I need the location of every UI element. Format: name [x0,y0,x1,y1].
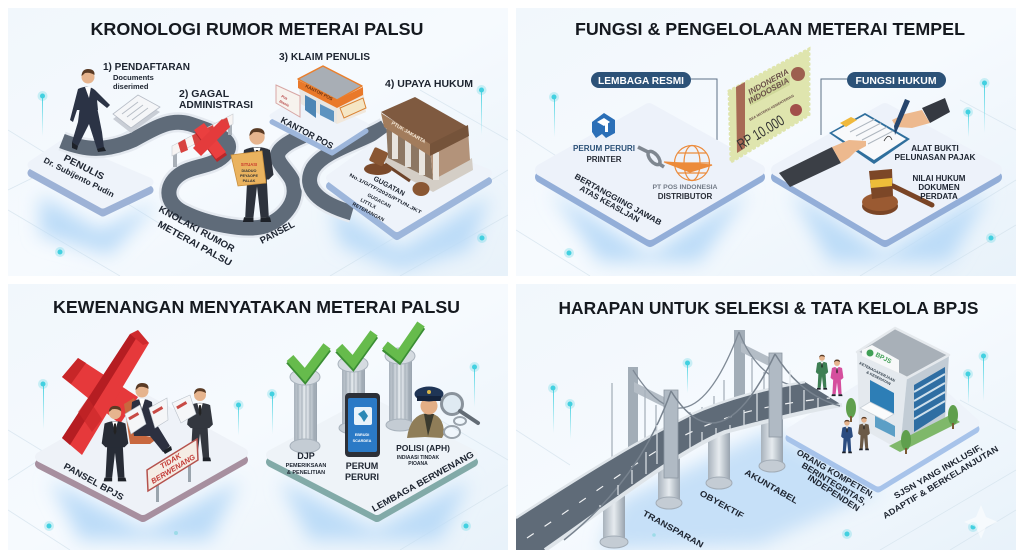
label: nilai hukum: NILAI HUKUM [913,174,966,183]
documents held [125,395,196,434]
label: 3 klaim penulis: 3) KLAIM PENULIS [279,52,370,63]
label: kantor pos: KANTOR POS [279,115,335,151]
person: left official [102,406,128,481]
label: orang kompeten: ORANG KOMPETEN, [795,447,876,500]
panel: fungsi dan pengelolaan meterai tempel [516,8,1016,276]
label: polisi aph: POLISI (APH) [396,443,450,453]
sign: klaim penulis [276,85,300,117]
title: FUNGSI & PENGELOLAAN METERAI TEMPEL [575,19,965,39]
clipboard [829,113,910,164]
label: transparan: TRANSPARAN [641,508,705,550]
magnifier and handcuffs [442,394,478,438]
label: gugatan: RETERANGAN [351,201,385,224]
label: akuntabel: AKUNTABEL [743,467,800,506]
person: penulis walking [70,69,110,152]
label: djp [286,451,326,476]
label: perum peruri [345,461,379,482]
panel: harapan untuk seleksi dan tata kelola bpjs [516,284,1016,550]
label: 2 gagal administrasi: 2) GAGAL [179,88,230,100]
label: sjsn: SJSN YANG INKLUSIF, [892,442,984,501]
label: djp: DJP [297,451,315,461]
phone: EBRUDI [355,433,369,437]
label: pt pos distributor [652,184,718,199]
sparkle watermark [964,505,998,539]
label: gugatan: LITTLX [359,197,377,211]
logo: pos indonesia [664,146,712,180]
label: djp: PEMERIKSAAN [286,463,326,469]
pillar: polisi [385,348,415,431]
title: HARAPAN UNTUK SELEKSI & TATA KELOLA BPJS [558,298,978,318]
gavel [862,169,932,215]
bridge deck [516,382,842,550]
sign: tidak berwenang: BERWENANG [149,452,197,486]
label: polisi aph: INDIAASI TINDAK [397,455,439,461]
marker dots [38,85,487,257]
label: pt pos distributor: PT POS INDONESIA [652,184,718,191]
label: knolaki rumor: METERAI PALSU [156,219,234,269]
hand: left sleeve [779,140,866,187]
label: obyektif: OBYEKTIF [698,488,746,521]
phone [345,393,380,457]
platform: penulis [32,145,149,212]
label: pansel bpjs: PANSEL BPJS [62,461,125,502]
label: 1 pendaftaran: Documents [113,73,154,82]
gavel [364,147,430,196]
label: perum peruri: PERUM [346,461,378,471]
panel: kewenangan menyatakan meterai palsu [8,284,508,550]
lawn and trees [846,398,960,454]
label: polisi aph: PIOANA [408,461,428,467]
label: gugatan [348,172,422,224]
marker dots [548,351,988,539]
document stack [113,95,160,133]
title: KRONOLOGI RUMOR METERAI PALSU [90,19,424,39]
bpjs building [857,328,949,450]
platform: bpjs [790,360,975,488]
panel: kronologi rumor meterai palsu [8,8,508,276]
folder: PALAK [243,179,256,183]
label: 1 pendaftaran [104,62,190,89]
kantor pos building: KANTOR POS [305,83,333,101]
marker dots [549,78,996,258]
courthouse: PTUK JAKARTA [390,121,427,145]
sign: tidak berwenang [147,439,198,502]
label: perum peruri printer [574,145,634,162]
label: knolaki rumor: KNOLAKI RUMOR [157,204,236,255]
bpjs building: BPJS [874,352,893,366]
seated official [130,383,172,454]
stamp rp 10.000 [729,49,809,162]
label: bertanggung jawab: BERTANGGIING JAWAB [573,172,663,227]
bridge front towers and cables [564,353,840,540]
stamp rp 10.000: RP 10.000 [734,112,788,153]
label: alat bukti: ALAT BUKTI [911,144,959,153]
kantor pos building [298,66,366,124]
label: pt pos distributor: DISTRIBUTOR [658,192,712,201]
label: pansel: PANSEL [258,219,297,247]
red x [193,119,230,162]
winding road [62,122,385,228]
label: gugatan: GUGATAN [372,176,406,198]
title: KEWENANGAN MENYATAKAN METERAI PALSU [53,297,460,317]
pillar: djp [290,369,320,453]
phone: SCARDEA [353,439,372,443]
folder: SITUASI [241,162,257,167]
courthouse [381,97,473,192]
label: alat bukti [894,144,976,162]
sign: klaim penulis: Pos [281,94,288,101]
platform: lembaga berwenang [271,402,473,517]
people near building [816,355,870,453]
label: perum peruri printer: PRINTER [586,155,622,164]
sign: tidak berwenang: TIDAK [158,451,183,471]
stamp rp 10.000: INDOOSBIA [747,76,791,106]
label: gugatan: No.1/G/TF/2025/PTUN.JKT [348,172,422,216]
label: alat bukti: PELUNASAN PAJAK [894,153,976,162]
platform: pansel bpjs [40,398,243,517]
bridge piers [600,415,785,548]
check marks [290,324,421,377]
stamp rp 10.000: BEA MATERAI KEMENTERIAN [749,94,795,122]
police officer [407,386,444,438]
platform: lembaga resmi [541,109,759,241]
label: djp: & PENELITIAN [287,470,325,476]
label: nilai hukum: PERDATA [920,192,958,201]
bpjs building: & KESEHATAN [866,370,892,386]
label: 2 gagal administrasi [179,90,252,108]
label: gugatan: GUGACAN [366,192,392,210]
label: bertanggung jawab: ATAS KEASLJAN [578,184,641,224]
label: 1 pendaftaran: 1) PENDAFTARAN [103,61,190,73]
label: nilai hukum [913,174,966,201]
logo: perum peruri [592,113,615,138]
label: 2 gagal administrasi: ADMINISTRASI [179,99,253,111]
bridge rear towers and cables [612,330,808,462]
pill: lembaga resmi: LEMBAGA RESMI [598,76,684,87]
label: polisi aph [396,443,450,467]
label: penulis: Dr. Subijento Pudin [42,156,116,199]
folder: PEYAOPE [240,174,258,178]
label: nilai hukum: DOKUMEN [918,183,960,192]
folder [231,151,266,186]
label: penulis: PENULIS [62,153,106,183]
platform: fungsi hukum [771,174,1002,248]
label: perum peruri: PERURI [345,472,379,482]
stamp rp 10.000: INDONERIA [747,67,790,97]
sign: klaim penulis: Bisnis [279,99,290,108]
chair [124,398,158,444]
pill: lembaga resmi [591,72,691,88]
label: lembaga berwenang: LEMBAGA BERWENANG [370,449,476,514]
person: right official [187,388,213,461]
label: 1 pendaftaran: diserimed [113,82,149,91]
label: sjsn: ADAPTIF & BERKELANJUTAN [881,444,1000,521]
label: perum peruri printer: PERUM PERURI [573,144,635,153]
connector lines [691,79,847,140]
platform: upaya hukum [330,135,488,236]
barrier [172,114,233,167]
bpjs building: KETENAGAKERJAAN [859,361,896,383]
pill: fungsi hukum [847,72,946,88]
folder: DIADUO [242,169,257,173]
pill: fungsi hukum: FUNGSI HUKUM [856,76,936,87]
pillar: peruri [338,356,368,434]
big red x [62,330,149,455]
marker dots [38,362,480,535]
platform: kantor pos [270,118,368,156]
label: 4 upaya hukum: 4) UPAYA HUKUM [385,79,473,90]
person: holding folder [240,128,274,222]
label: orang kompeten: INDEPENDEN [806,472,862,513]
icon: chain [638,147,664,167]
hand: signing with pen [892,98,950,135]
label: orang kompeten: BERINTEGRITAS, [800,460,869,507]
